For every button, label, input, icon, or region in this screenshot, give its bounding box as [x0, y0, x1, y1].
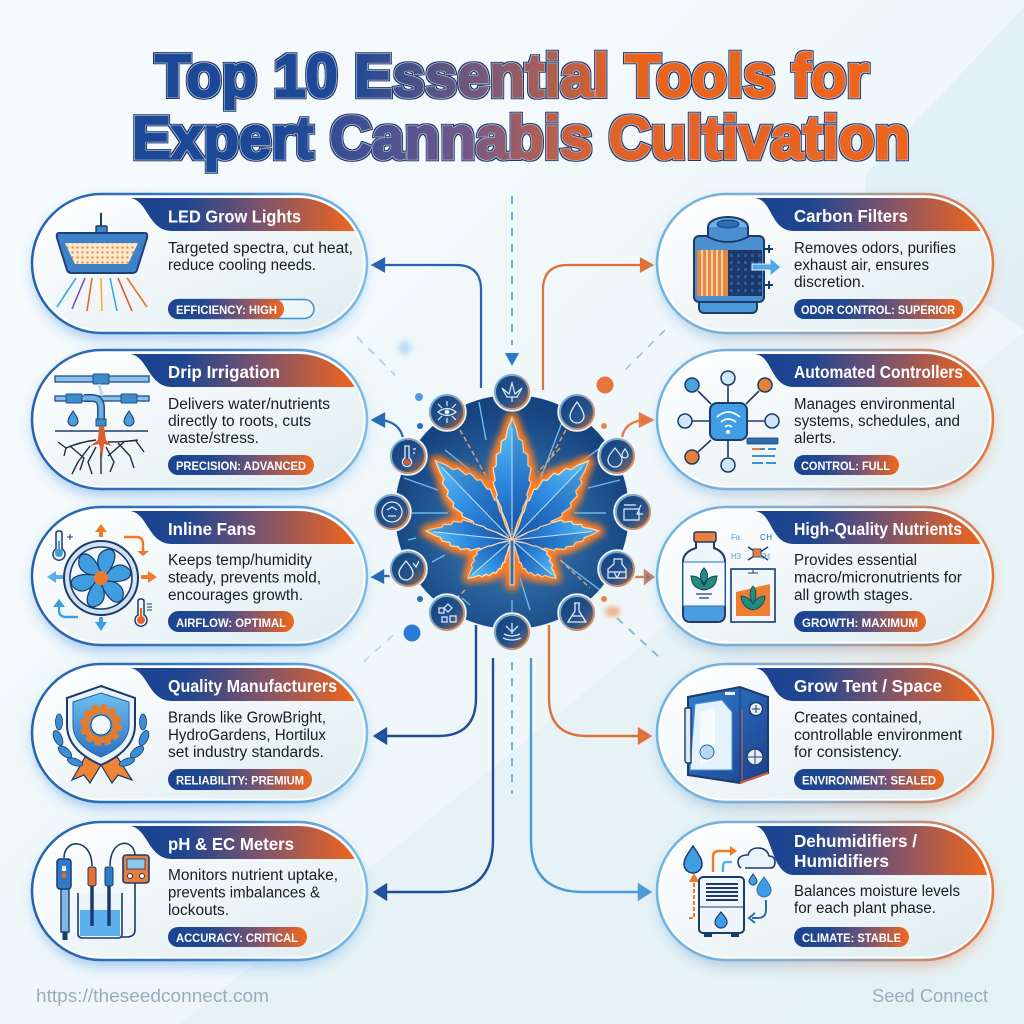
title: Grow Tent / Space — [794, 676, 942, 696]
description: all growth stages. — [794, 587, 913, 604]
badge: GROWTH: MAXIMUM — [802, 616, 918, 630]
badge: CONTROL: FULL — [801, 459, 890, 473]
description: HydroGardens, Hortilux — [168, 727, 326, 744]
badge — [794, 455, 899, 475]
description: encourages growth. — [168, 587, 303, 604]
connector: top center dashed arrow — [505, 196, 519, 366]
hub node: dial — [374, 494, 410, 530]
hub node: flask — [559, 595, 595, 631]
description: Balances moisture levels — [794, 883, 960, 900]
title: High-Quality Nutrients — [794, 519, 962, 539]
badge — [168, 611, 294, 632]
description: macro/micronutrients for — [794, 570, 962, 586]
connector: middle right arrow — [632, 571, 653, 583]
connector: bottom right arrow — [531, 658, 650, 899]
hub node: drops — [599, 438, 635, 474]
badge — [794, 611, 926, 632]
card: Drip Irrigation — [32, 350, 367, 495]
icon: nutrient bottle and pouch — [683, 532, 775, 622]
title: LED Grow Lights — [168, 206, 301, 226]
badge: ODOR CONTROL: SUPERIOR — [801, 303, 955, 317]
icon: nutrient bottle and pouch: Fa — [731, 533, 741, 542]
icon: meters and beaker — [57, 843, 149, 940]
icon: controller network — [678, 371, 779, 472]
title: Dehumidifiers / — [794, 831, 917, 851]
hub node: small leaf — [494, 374, 530, 410]
hub disc — [395, 395, 629, 629]
description: Creates contained, — [794, 710, 922, 726]
card: Quality Manufacturers — [32, 664, 367, 808]
card: Grow Tent / Space — [657, 664, 993, 808]
description: steady, prevents mold, — [168, 570, 321, 586]
hub node: scatter — [429, 595, 465, 631]
hub node: thermometer — [390, 438, 426, 474]
footer url: https://theseedconnect.com — [36, 985, 269, 1006]
badge — [794, 769, 944, 790]
connector: top right orange arrow — [543, 259, 652, 390]
badge: RELIABILITY: PREMIUM — [176, 774, 304, 788]
description: Targeted spectra, cut heat, — [168, 240, 353, 257]
description: directly to roots, cuts — [168, 413, 311, 430]
badge — [168, 927, 307, 947]
card: Dehumidifiers / Humidifiers — [657, 822, 993, 966]
badge — [168, 299, 314, 319]
badge: EFFICIENCY: HIGH — [176, 303, 277, 317]
card: Inline Fans — [32, 507, 367, 651]
description: systems, schedules, and — [794, 413, 960, 430]
card: Carbon Filters — [657, 194, 993, 339]
description: for consistency. — [794, 744, 902, 761]
connector: bottom left arrow — [375, 658, 493, 899]
description: Keeps temp/humidity — [168, 552, 312, 569]
main title — [132, 42, 910, 172]
connector: top left blue arrow — [373, 259, 481, 388]
description: set industry standards. — [168, 744, 324, 761]
icon: LED panel — [57, 213, 147, 311]
hub node: drop mark — [390, 551, 426, 587]
connector: bottom center dashed line — [511, 662, 513, 794]
icon: shield and gear — [51, 686, 151, 783]
description: discretion. — [794, 274, 865, 291]
card: Automated Controllers — [657, 350, 993, 495]
badge: AIRFLOW: OPTIMAL — [176, 616, 286, 630]
badge — [794, 927, 909, 947]
connector: lower left arrow — [375, 625, 476, 743]
description: Delivers water/nutrients — [168, 396, 330, 413]
icon: drip pipes and roots — [55, 374, 149, 474]
icon: nutrient bottle and pouch: OH — [760, 552, 770, 561]
central hub — [374, 374, 651, 650]
main title: Expert Cannabis Cultivation — [132, 104, 910, 172]
connector: upper left curve arrow — [373, 414, 403, 438]
badge: CLIMATE: STABLE — [802, 931, 901, 945]
title: pH & EC Meters — [168, 834, 294, 854]
description: alerts. — [794, 430, 836, 447]
footer brand: Seed Connect — [872, 985, 988, 1006]
description: Provides essential — [794, 552, 917, 569]
connector: upper right curve arrow — [622, 414, 652, 438]
badge: ACCURACY: CRITICAL — [176, 931, 298, 945]
icon: fan — [47, 524, 157, 631]
title: Drip Irrigation — [168, 362, 280, 382]
title: Humidifiers — [794, 851, 889, 871]
description: controllable environment — [794, 727, 963, 744]
description: Brands like GrowBright, — [168, 710, 326, 726]
title: Carbon Filters — [794, 206, 908, 226]
hub rays — [404, 402, 620, 615]
title: Automated Controllers — [794, 362, 963, 382]
badge — [168, 769, 312, 790]
hub node: plant — [494, 614, 530, 650]
description: waste/stress. — [167, 430, 259, 447]
icon: carbon filter — [694, 217, 781, 313]
description: exhaust air, ensures — [794, 257, 929, 274]
description: lockouts. — [168, 902, 229, 919]
card: LED Grow Lights — [32, 194, 367, 339]
badge — [168, 455, 314, 475]
icon: nutrient bottle and pouch: CH — [760, 533, 772, 542]
hub node: box — [615, 494, 651, 530]
icon: nutrient bottle and pouch: H3 — [731, 552, 742, 561]
connector: lower right arrow — [549, 625, 650, 743]
card: High-Quality Nutrients — [657, 507, 993, 651]
hub node: drop — [559, 394, 595, 430]
hub glowing leaf — [422, 418, 602, 589]
hub node: bottle — [599, 551, 635, 587]
description: Manages environmental — [794, 396, 955, 413]
description: Removes odors, purifies — [794, 240, 956, 257]
description: for each plant phase. — [794, 900, 936, 917]
main title: Top 10 Essential Tools for — [155, 42, 869, 110]
badge: PRECISION: ADVANCED — [176, 459, 306, 473]
decorative dashes and dots — [357, 330, 665, 667]
description: Monitors nutrient uptake, — [168, 867, 338, 884]
title: Quality Manufacturers — [168, 676, 337, 696]
icon: dehumidifier — [684, 846, 775, 937]
description: reduce cooling needs. — [168, 257, 316, 274]
description: prevents imbalances & — [168, 884, 321, 902]
connector: middle left arrow — [373, 571, 392, 582]
hub node: spark — [429, 394, 465, 430]
icon: grow tent — [685, 687, 768, 783]
title: Inline Fans — [168, 519, 256, 539]
badge: ENVIRONMENT: SEALED — [802, 774, 936, 788]
card: pH & EC Meters — [32, 822, 367, 966]
badge — [794, 299, 963, 319]
